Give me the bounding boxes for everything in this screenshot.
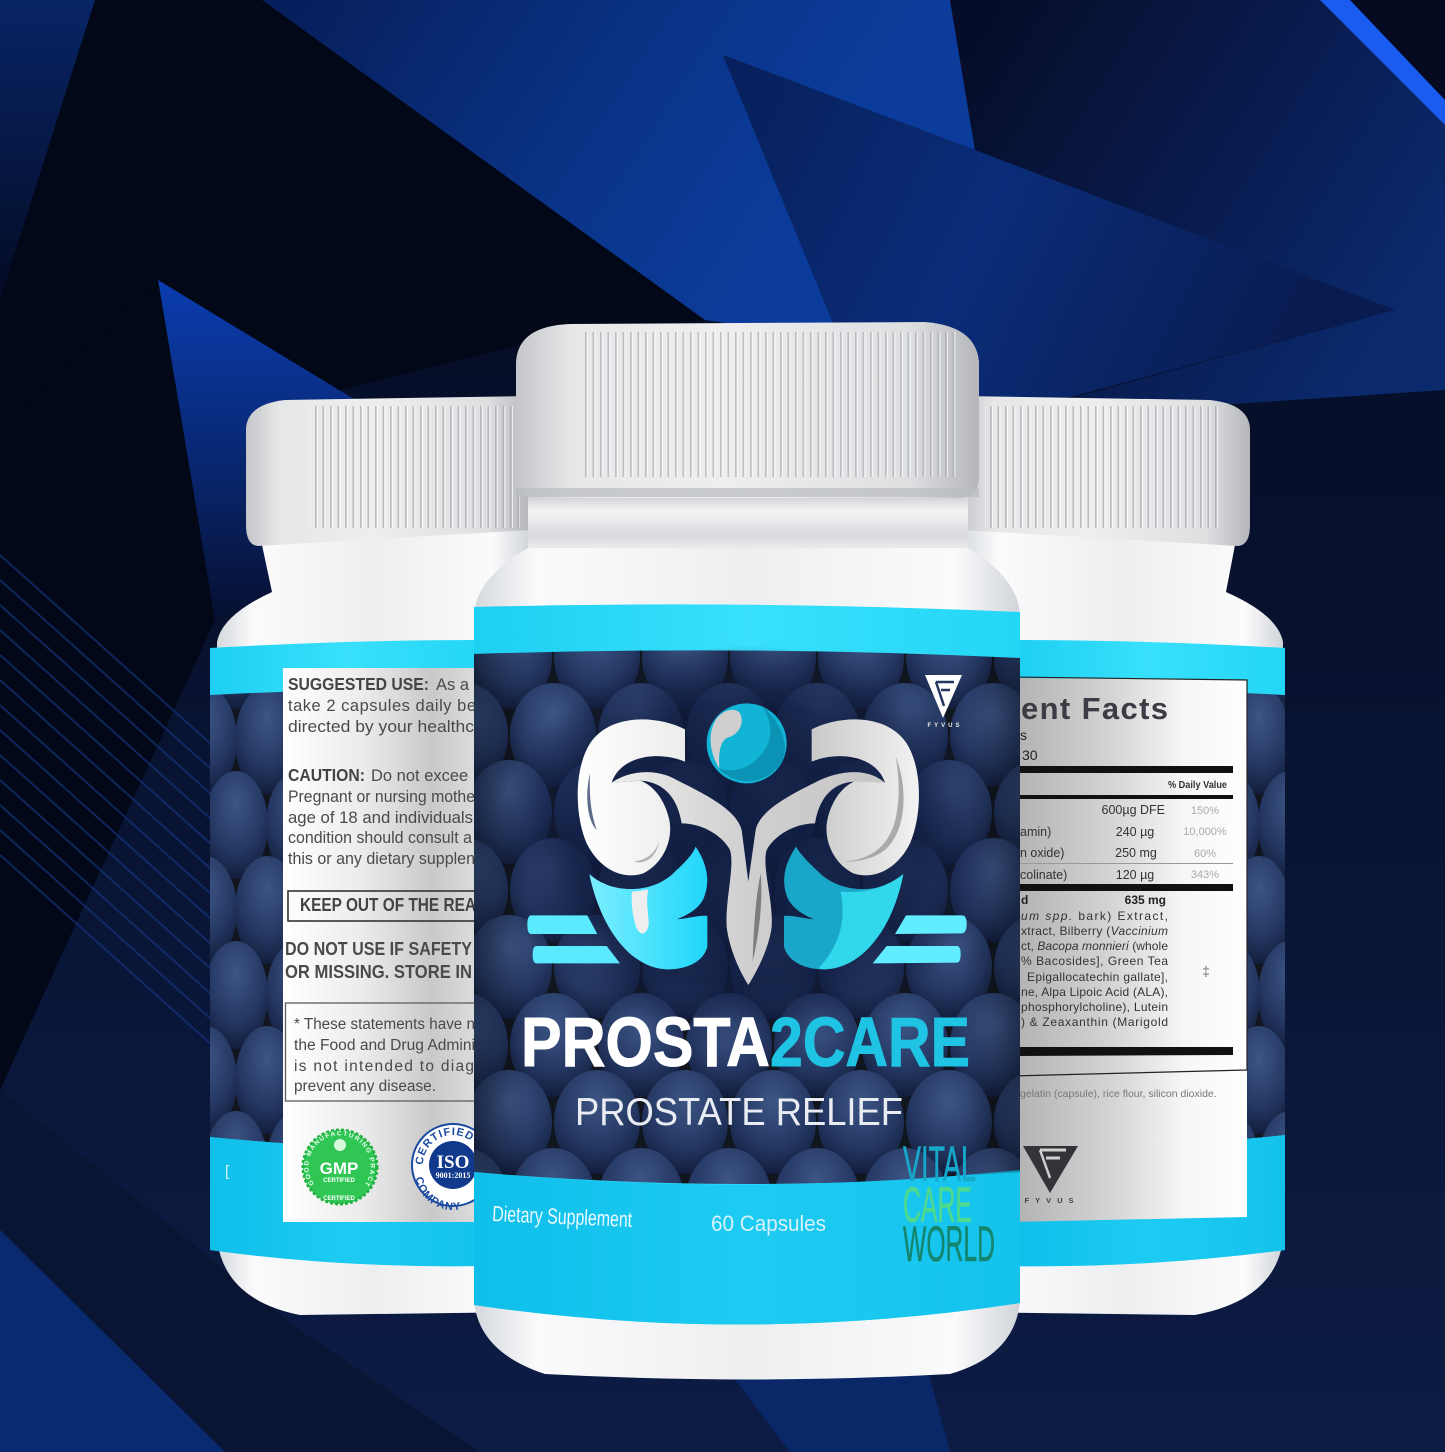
ingredient list: ) & Zeaxanthin (Marigold <box>1021 1015 1168 1029</box>
nutrition table: 343% <box>1191 869 1219 881</box>
watermark: vital care world <box>903 1136 995 1272</box>
keep out box <box>288 891 488 921</box>
nutrition table: 120 µg <box>1116 868 1154 882</box>
ingredient list: % Bacosides], Green Tea <box>1021 954 1168 968</box>
left label <box>210 640 476 1266</box>
back-right bottle <box>960 396 1285 1315</box>
safety warning: DO NOT USE IF SAFETY <box>285 939 472 959</box>
emblem: right kidney <box>812 719 919 875</box>
brand name: 2CARE <box>770 1003 970 1081</box>
ISO seal: ISO <box>437 1152 469 1173</box>
nutrition table: ‡ <box>1202 963 1210 979</box>
keep out box: KEEP OUT OF THE REA <box>300 895 476 915</box>
safety warning: OR MISSING. STORE IN <box>285 962 472 982</box>
GMP seal <box>302 1128 378 1206</box>
suggested use text: SUGGESTED USE: <box>288 674 429 694</box>
ingredient list: phosphorylcholine), Lutein <box>1021 1000 1168 1014</box>
front bottle cap <box>516 322 979 498</box>
emblem: central tube <box>612 772 885 985</box>
caution text: this or any dietary supplen <box>288 850 475 868</box>
ingredient list: ne, Alpa Lipoic Acid (ALA), <box>1021 985 1168 999</box>
nutrition table: 600µg DFE <box>1102 803 1165 817</box>
brand name: PROSTA <box>521 1003 770 1081</box>
front label: WORLD <box>903 1216 995 1272</box>
ISO seal: 9001:2015 <box>436 1171 470 1180</box>
dietary supplement: Dietary Supplement <box>492 1201 633 1232</box>
ingredient list: Epigallocatechin gallate], <box>1027 970 1168 984</box>
disclaimer box: * These statements have n <box>294 1016 475 1033</box>
serving text: 30 <box>1022 747 1038 763</box>
bracket glyph: [ <box>225 1163 230 1180</box>
GMP seal: GMP <box>320 1159 358 1178</box>
front bottle neck <box>528 490 968 560</box>
emblem: sphere <box>707 703 787 783</box>
emblem: left leaf <box>589 847 707 969</box>
ingredient list: um spp. bark) Extract, <box>1021 909 1168 923</box>
left bottle cap <box>246 396 530 546</box>
disclaimer box: is not intended to diag <box>294 1058 474 1075</box>
watermark: vital care world: CARE <box>903 1177 972 1233</box>
nutrition table: colinate) <box>1020 868 1067 882</box>
front bottle body <box>474 548 1020 1380</box>
left bottle body <box>217 530 530 1315</box>
caution text: CAUTION: <box>288 765 365 785</box>
front label <box>474 604 1020 1325</box>
nutrition table: n oxide) <box>1020 846 1064 860</box>
ingredient list: xtract, Bilberry (Vaccinium <box>1021 924 1168 938</box>
ingredient list: ct, Bacopa monnieri (whole <box>1021 939 1168 953</box>
ISO seal: CERTIFIED <box>416 1128 473 1164</box>
icon: Fyvus logo dark <box>1023 1146 1080 1205</box>
nutrition table: 150% <box>1191 805 1219 817</box>
right bottle body <box>960 530 1283 1315</box>
disclaimer box <box>286 1003 486 1101</box>
serving text: s <box>1020 727 1027 743</box>
icon: kidney and prostate emblem <box>527 703 967 985</box>
nutrition table: 635 mg <box>1125 893 1166 907</box>
right label <box>1010 640 1285 1266</box>
caution text: Do not excee <box>371 767 468 785</box>
right bottle cap <box>960 396 1250 546</box>
nutrition table: % Daily Value <box>1168 779 1227 791</box>
nutrition table: 10,000% <box>1183 826 1227 838</box>
suggested use text: directed by your healthc <box>288 718 474 736</box>
GMP seal: CERTIFIED <box>323 1196 355 1202</box>
GMP seal: GOOD MANUFACTURING PRACTICE <box>304 1130 375 1187</box>
emblem: right bars <box>873 915 967 963</box>
product subtitle: PROSTATE RELIEF <box>575 1091 903 1134</box>
disclaimer box: the Food and Drug Admini <box>294 1037 475 1054</box>
nutrition table <box>1010 766 1233 1056</box>
emblem: left kidney <box>578 719 685 875</box>
caution text: age of 18 and individuals <box>288 809 473 827</box>
capsule count: 60 Capsules <box>711 1211 826 1236</box>
nutrition table: amin) <box>1020 825 1051 839</box>
ingredient list <box>1021 909 1168 1029</box>
emblem: left bars <box>527 915 620 963</box>
suggested use text: take 2 capsules daily be <box>288 697 476 715</box>
nutrition table: d <box>1021 893 1028 907</box>
disclaimer box: prevent any disease. <box>294 1078 436 1095</box>
icon: Fyvus logo white <box>925 675 963 729</box>
caution text: Pregnant or nursing mothe <box>288 788 475 806</box>
nutrition table: 60% <box>1194 848 1216 860</box>
other ingredients text: gelatin (capsule), rice flour, silicon dioxide. <box>1020 1088 1217 1100</box>
icon: Fyvus logo white: FYVUS <box>927 723 963 729</box>
suggested use text: As a <box>436 676 470 694</box>
supplement facts heading: ent Facts <box>1021 691 1168 726</box>
ISO seal: COMPANY <box>416 1177 460 1210</box>
back-left bottle <box>210 396 528 1315</box>
emblem: right leaf <box>784 847 903 969</box>
ISO seal <box>411 1123 474 1210</box>
nutrition table: 250 mg <box>1115 846 1157 860</box>
caution text: condition should consult a <box>288 829 473 847</box>
watermark: vital care world: VITAL <box>903 1136 976 1192</box>
nutrition table: 240 µg <box>1116 825 1154 839</box>
front bottle <box>474 322 1020 1380</box>
icon: Fyvus logo dark: FYVUS <box>1024 1196 1080 1205</box>
GMP seal: CERTIFIED <box>323 1178 355 1184</box>
